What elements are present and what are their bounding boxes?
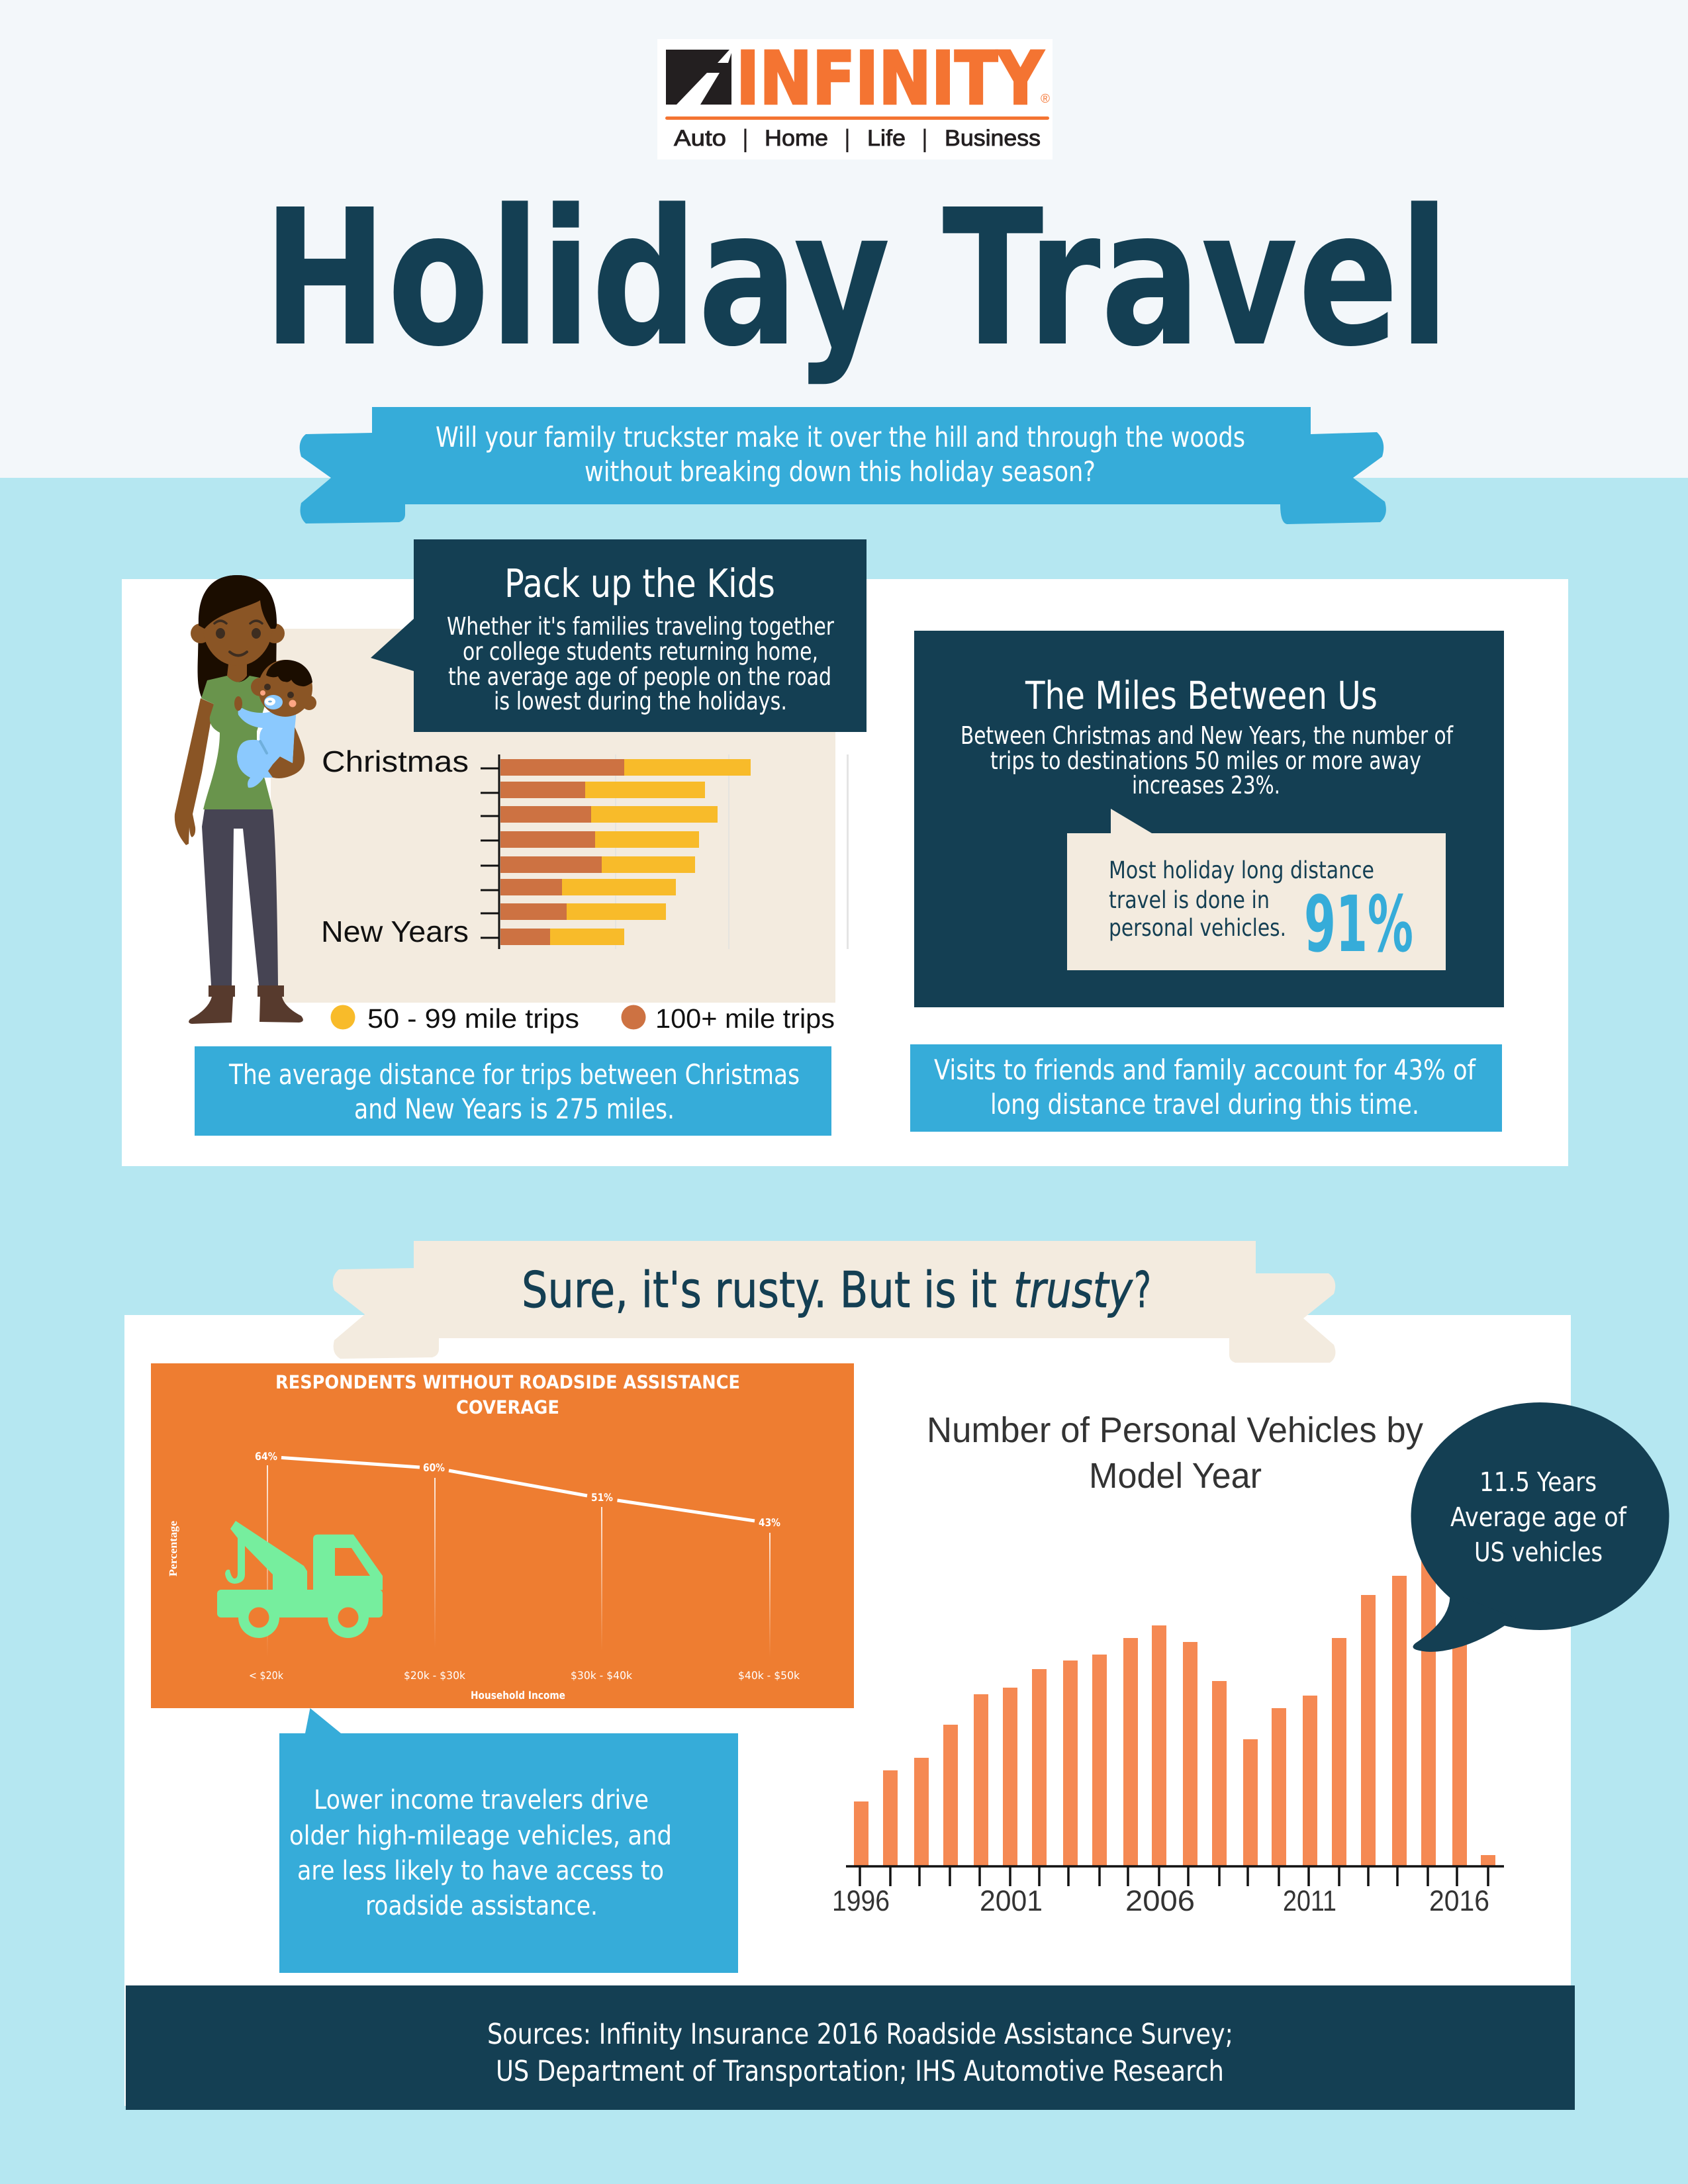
bar chart: trips from Christmas to New Years <box>321 745 849 949</box>
chart title: personal vehicles by model year: Model Year <box>1089 1456 1262 1496</box>
right arm <box>261 727 305 778</box>
ribbon heading: ? <box>1134 1261 1151 1319</box>
body text: trips to destinations 50 miles or more away <box>990 747 1421 775</box>
boots <box>189 985 303 1024</box>
x axis labels: $40k - $50k <box>738 1669 800 1682</box>
chart title <box>275 1371 740 1418</box>
year labels <box>832 1885 1489 1917</box>
x axis labels: $30k - $40k <box>571 1669 633 1682</box>
ribbon heading: Sure, it's rusty. But is it <box>522 1261 997 1319</box>
logo tagline: | <box>742 125 749 153</box>
caption box: visits to friends and family: long distance travel during this time. <box>990 1088 1419 1120</box>
heading: Pack up the Kids <box>504 561 775 606</box>
panel: bar chart background <box>271 629 835 1003</box>
data labels: 43% <box>759 1516 780 1529</box>
bars <box>854 1542 1495 1866</box>
neck <box>227 659 247 682</box>
axis and ticks <box>846 1866 1504 1886</box>
x axis labels: < $20k <box>249 1669 284 1682</box>
face <box>203 585 273 666</box>
panel: roadside assistance line chart <box>151 1363 854 1708</box>
logo tagline: Home <box>765 126 828 151</box>
year labels: 2011 <box>1283 1885 1336 1917</box>
body text <box>447 612 835 715</box>
logo tagline: Auto <box>674 126 726 151</box>
callout: lower income travelers: older high-mileage vehicles, and <box>289 1821 672 1851</box>
icon: road square <box>666 50 731 105</box>
body text: Between Christmas and New Years, the number of <box>961 721 1454 750</box>
callout: 91 percent personal vehicles: Most holiday long distance <box>1109 857 1374 884</box>
callout: Pack up the Kids <box>371 539 867 732</box>
hair fringe <box>199 575 277 629</box>
heading: The Miles Between Us <box>1025 673 1378 718</box>
chart title: COVERAGE <box>456 1396 559 1418</box>
body text <box>961 721 1454 799</box>
year labels: 2001 <box>980 1885 1043 1917</box>
footer: sources <box>126 1985 1575 2110</box>
year labels: 1996 <box>832 1885 890 1917</box>
legend <box>331 1003 835 1034</box>
chart title: personal vehicles by model year <box>927 1410 1423 1496</box>
stat: 91%: 91% <box>1304 879 1413 970</box>
icon: tow truck <box>217 1521 383 1638</box>
bar chart: vehicles by model year <box>832 1542 1504 1917</box>
ribbon heading: trusty <box>1013 1261 1133 1319</box>
drop lines <box>267 1465 771 1657</box>
logo tagline: Business <box>945 126 1041 151</box>
callout: 91 percent personal vehicles: travel is done in <box>1109 887 1270 914</box>
footer: sources: Sources: Infinity Insurance 2016 Roadside Assistance Survey; <box>487 2018 1233 2051</box>
body text: or college students returning home, <box>463 637 818 666</box>
x axis title: Household Income <box>471 1689 565 1702</box>
banner text: Will your family truckster make it over the hill and through the woods <box>436 421 1245 453</box>
speech bubble: average age <box>1411 1402 1669 1652</box>
speech bubble: average age: 11.5 Years <box>1479 1467 1597 1498</box>
body text: the average age of people on the road <box>448 662 831 691</box>
panel: The Miles Between Us <box>914 631 1504 1007</box>
y axis title: Percentage <box>167 1521 179 1576</box>
body text: increases 23%. <box>1132 771 1280 799</box>
left arm <box>175 698 214 845</box>
callout: 91 percent personal vehicles <box>1067 809 1446 970</box>
body text: Whether it's families traveling together <box>447 612 835 641</box>
chart title: personal vehicles by model year: Number of Personal Vehicles by <box>927 1410 1423 1450</box>
panel: white upper card <box>122 579 1568 1166</box>
caption box: average distance: The average distance for trips between Christmas <box>228 1058 800 1091</box>
logo tagline: | <box>844 125 851 153</box>
logo tagline: Life <box>867 126 906 151</box>
pants <box>202 809 278 985</box>
facial features <box>214 621 262 655</box>
caption box: average distance: and New Years is 275 miles. <box>354 1093 675 1125</box>
banner text <box>436 421 1245 488</box>
callout: lower income travelers <box>279 1708 738 1973</box>
label: Christmas: Christmas <box>322 745 469 778</box>
legend: 50 - 99 mile trips <box>367 1003 579 1034</box>
logo tagline <box>674 125 1041 153</box>
year labels: 2016 <box>1429 1885 1489 1917</box>
banner text: without breaking down this holiday season? <box>585 455 1096 488</box>
chart title: RESPONDENTS WITHOUT ROADSIDE ASSISTANCE <box>275 1371 740 1393</box>
data labels: 51% <box>591 1491 613 1504</box>
logo wordmark: INFINITY <box>736 36 1044 120</box>
legend: 100+ mile trips <box>655 1003 835 1034</box>
callout: lower income travelers: roadside assistance. <box>365 1891 598 1921</box>
label: New Years: New Years <box>321 915 469 948</box>
panel: white lower card <box>124 1315 1571 2106</box>
cream ribbon banner <box>333 1241 1335 1363</box>
callout: lower income travelers: are less likely to have access to <box>297 1856 664 1886</box>
speech bubble: average age: Average age of <box>1450 1502 1627 1533</box>
baby <box>234 660 316 788</box>
data labels: 64% <box>255 1450 277 1463</box>
bars <box>500 759 751 945</box>
year labels: 2006 <box>1125 1885 1195 1917</box>
shirt <box>201 676 273 809</box>
speech bubble: average age: US vehicles <box>1474 1537 1603 1568</box>
ears <box>191 623 211 643</box>
footer: sources: US Department of Transportation; IHS Automotive Research <box>496 2055 1224 2088</box>
callout: lower income travelers: Lower income travelers drive <box>314 1785 649 1815</box>
x axis labels: $20k - $30k <box>404 1669 466 1682</box>
caption box: average distance <box>195 1046 831 1136</box>
logo tagline: | <box>921 125 928 153</box>
illustration: mother holding baby <box>175 575 316 1024</box>
data labels: 60% <box>423 1461 445 1474</box>
hair back <box>198 575 277 698</box>
data labels <box>255 1450 780 1529</box>
body text: is lowest during the holidays. <box>494 687 787 715</box>
top ribbon banner <box>300 407 1386 524</box>
caption box: visits to friends and family: Visits to friends and family account for 43% of <box>934 1054 1476 1086</box>
trend line <box>281 1457 755 1521</box>
callout: 91 percent personal vehicles: personal vehicles. <box>1109 915 1286 942</box>
registered mark: ® <box>1041 92 1050 106</box>
x axis labels <box>249 1669 800 1682</box>
caption box: visits to friends and family <box>910 1044 1502 1132</box>
logo: Infinity <box>657 36 1053 159</box>
